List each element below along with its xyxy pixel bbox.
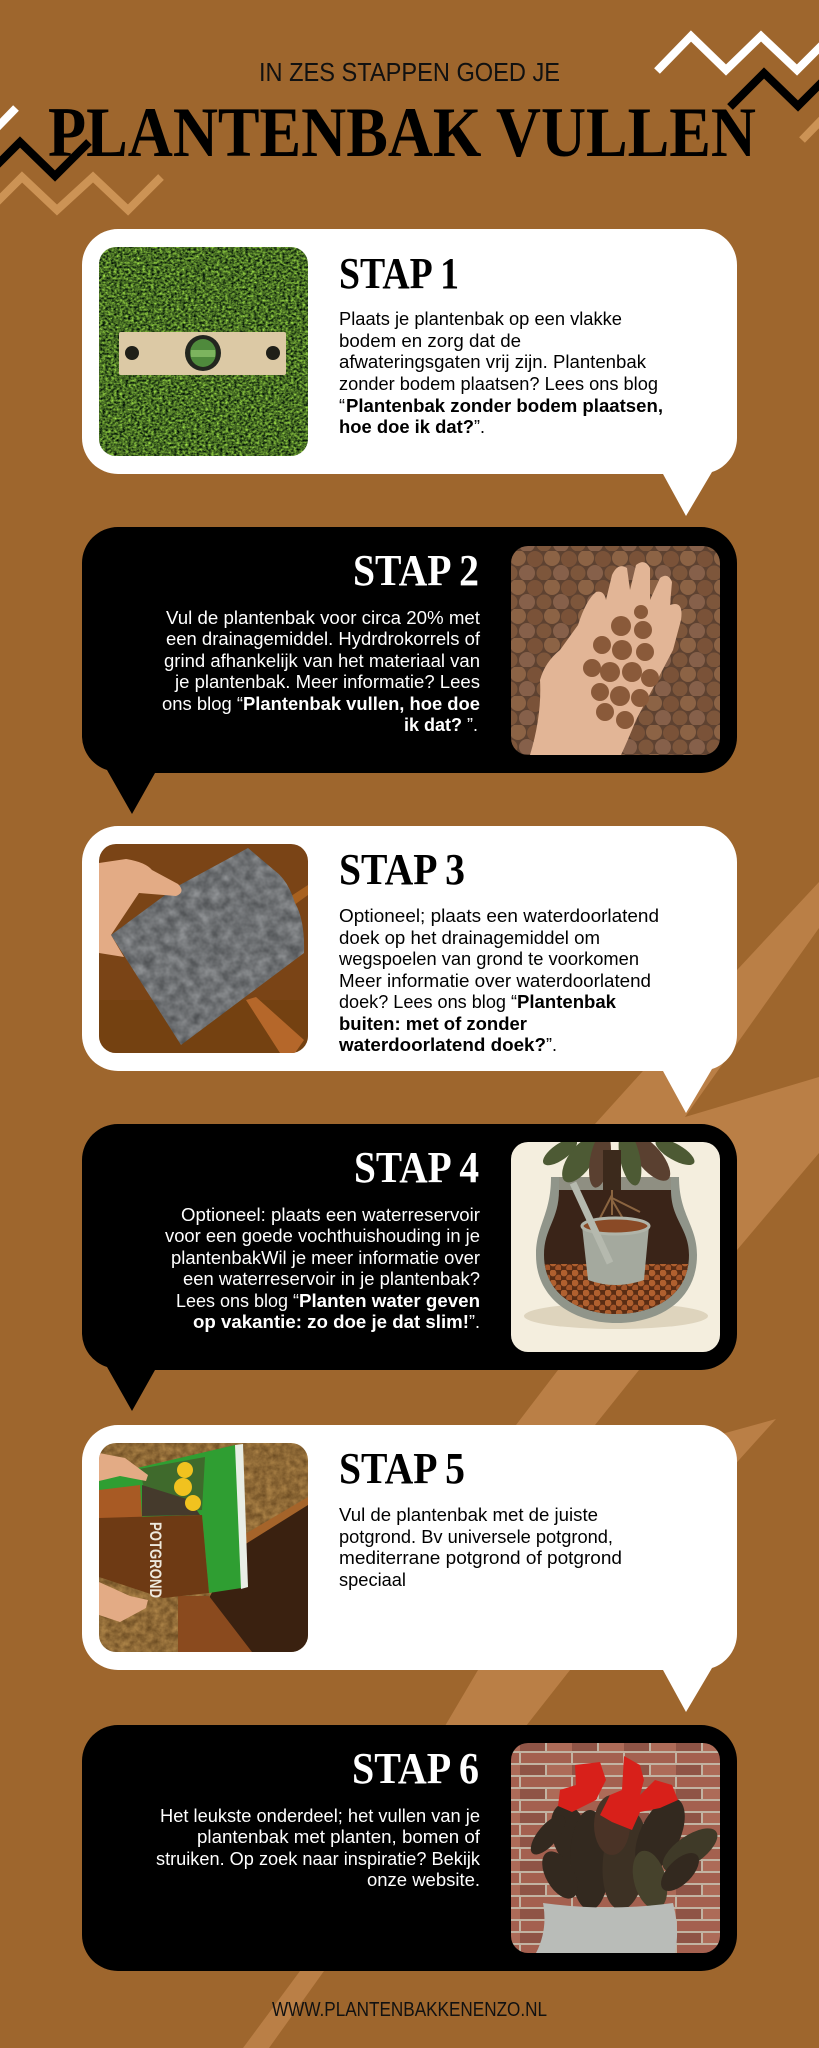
body text [165, 1205, 480, 1332]
bag label: POTGROND [146, 1522, 165, 1598]
photo: bag of potting soil [99, 1443, 308, 1652]
body text: wegspoelen van grond te voorkomen [338, 949, 639, 969]
speech bubble [82, 1124, 737, 1411]
body text: grind afhankelijk van het materiaal van [164, 651, 480, 671]
body text: zonder bodem plaatsen? Lees ons blog [339, 374, 658, 394]
body text [339, 309, 663, 437]
body text: ik dat? [404, 715, 462, 735]
rounded card [82, 1725, 737, 1971]
body text: Lees ons blog “ [176, 1291, 299, 1311]
body text [162, 608, 481, 735]
body text: buiten: met of zonder [339, 1014, 527, 1034]
body text: onze website. [367, 1870, 480, 1890]
body text: Vul de plantenbak met de juiste [339, 1505, 598, 1525]
body text: ”. [474, 417, 485, 437]
panel: step 4 [82, 1124, 737, 1411]
body text: Plantenbak zonder bodem plaatsen, [346, 396, 663, 416]
body text: Optioneel: plaats een waterreservoir [181, 1205, 480, 1225]
decorative zigzag: right [657, 32, 819, 140]
heading: STAP 1 [339, 249, 459, 298]
body text: Plantenbak vullen, hoe doe [243, 694, 480, 714]
footer website: WWW.PLANTENBAKKENENZO.NL [272, 1999, 547, 2021]
photo: hand with clay pebbles [511, 546, 720, 755]
body text: “ [339, 396, 345, 416]
body text: een drainagemiddel. Hydrdrokorrels of [166, 629, 481, 649]
speech bubble [82, 527, 737, 814]
body text: voor een goede vochthuishouding in je [165, 1226, 480, 1246]
body text: ”. [546, 1035, 557, 1055]
body text: plantenbakWil je meer informatie over [171, 1248, 480, 1268]
body text: afwateringsgaten vrij zijn. Plantenbak [339, 352, 647, 372]
body text: ”. [467, 715, 478, 735]
heading: STAP 4 [354, 1143, 479, 1192]
body text: Plantenbak [517, 992, 617, 1012]
heading: STAP 2 [353, 546, 479, 595]
body text: Planten water geven [299, 1291, 480, 1311]
body text [338, 906, 659, 1055]
body text: mediterrane potgrond of potgrond [339, 1548, 622, 1568]
body text: bodem en zorg dat de [339, 331, 521, 351]
speech bubble [82, 229, 737, 516]
panel: step 6 [82, 1725, 737, 1971]
body text: ”. [469, 1312, 480, 1332]
panel: step 3 [82, 826, 737, 1113]
body text: je plantenbak. Meer informatie? Lees [174, 672, 480, 692]
body text: waterdoorlatend doek? [338, 1035, 546, 1055]
illustration: pot with water reservoir [511, 1129, 720, 1352]
body text: op vakantie: zo doe je dat slim! [193, 1312, 469, 1332]
body text: hoe doe ik dat? [339, 417, 474, 437]
panel: step 1 [82, 229, 737, 516]
body text: speciaal [339, 1570, 406, 1590]
body text: Meer informatie over waterdoorlatend [339, 971, 651, 991]
photo: hand holding filter cloth [99, 844, 308, 1053]
speech bubble [82, 1425, 737, 1712]
decorative zigzag: left [0, 108, 161, 214]
body text: een waterreservoir in je plantenbak? [183, 1269, 480, 1289]
heading: STAP 5 [339, 1444, 465, 1493]
photo: spirit level on grass [99, 247, 308, 456]
body text: ons blog “ [162, 694, 243, 714]
heading: STAP 3 [339, 845, 465, 894]
heading: STAP 6 [352, 1744, 479, 1793]
body text: Vul de plantenbak voor circa 20% met [166, 608, 480, 628]
body text [339, 1505, 622, 1590]
body text: plantenbak met planten, bomen of [197, 1827, 481, 1847]
body text: doek op het drainagemiddel om [339, 928, 600, 948]
photo: planter with red flowers against brick wall [511, 1743, 724, 1953]
body text: doek? Lees ons blog “ [339, 992, 517, 1012]
body text: struiken. Op zoek naar inspiratie? Bekijk [156, 1849, 481, 1869]
body text: Het leukste onderdeel; het vullen van je [160, 1806, 480, 1826]
body text: Optioneel; plaats een waterdoorlatend [339, 906, 659, 926]
panel: step 2 [82, 527, 737, 814]
body text: potgrond. Bv universele potgrond, [339, 1527, 613, 1547]
background diagonal bands [243, 882, 819, 2048]
subtitle: IN ZES STAPPEN GOED JE [259, 57, 560, 87]
body text: Plaats je plantenbak op een vlakke [339, 309, 622, 329]
body text [156, 1806, 481, 1890]
speech bubble [82, 826, 737, 1113]
panel: step 5 [82, 1425, 737, 1712]
